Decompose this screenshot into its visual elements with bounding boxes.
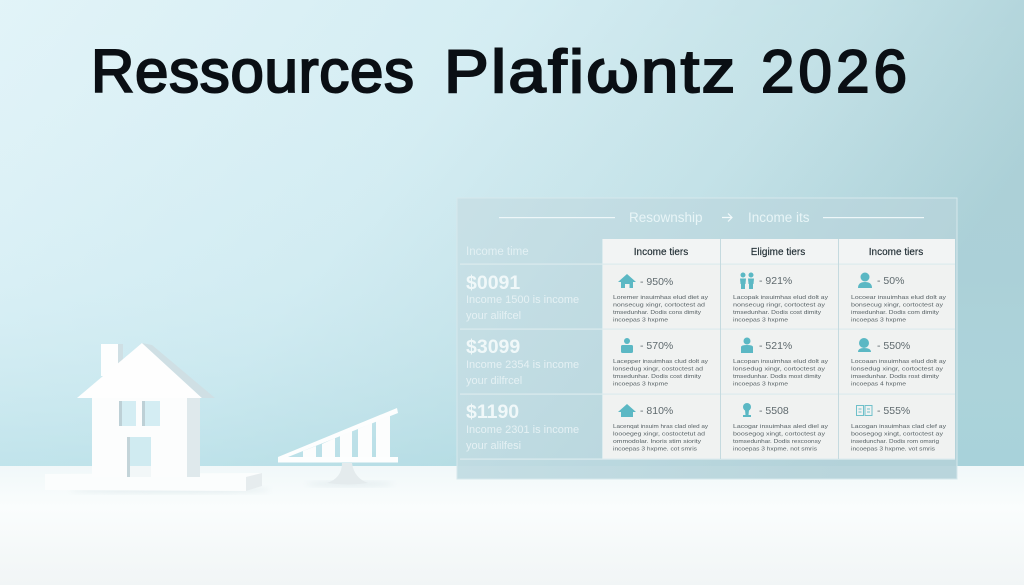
- title: Ressources: [91, 38, 414, 105]
- title: Plafiωntz: [444, 38, 735, 105]
- cell: row 1 col 1: tmsedunhar. Dodis cons dimity: [613, 310, 701, 316]
- cell: row 1 col 3: incoepas 3 hxpme: [851, 318, 906, 324]
- cell: row 3 col 2: Lacogar insuimhas aled diel ay: [733, 424, 828, 430]
- cell: row 2 col 3: - 550%: [877, 340, 910, 352]
- table body cells: [602, 264, 955, 459]
- cell: row 3 col 1: incoepas 3 hxpme. cot smris: [613, 446, 697, 452]
- row labels: [460, 239, 955, 460]
- cell: row 1 col 2: incoepas 3 hxpme: [733, 318, 788, 324]
- panel: income table: [457, 198, 957, 479]
- cell: row 2 col 1: incoepas 3 hxpme: [613, 382, 668, 388]
- cell: row 3 col 2: boosegog xingt, cortoctest ay: [733, 432, 825, 438]
- cell: row 1 col 3: Locoear insuimhas elud dolt ay: [851, 295, 946, 301]
- cell: row 3 col 2: tomsedunhar. Dodis rexcoonsy: [733, 439, 821, 445]
- row 3 label: [466, 401, 579, 452]
- cell: row 1 col 1: - 950%: [640, 276, 673, 288]
- row 1 label: [466, 272, 579, 322]
- table header cells: Eligime tiers: [751, 247, 805, 258]
- row 3 label: Income 2301 is income: [466, 424, 579, 436]
- cell: row 1 col 1: Loremer insuimhas elud diet ay: [613, 295, 708, 301]
- panel background: [457, 198, 957, 479]
- icon: white model house: [45, 343, 270, 492]
- cell: row 2 col 1: - 570%: [640, 340, 673, 352]
- cell: row 3 col 1: ommodolar. Inoris stim siority: [613, 439, 701, 445]
- cell: row 3 col 1: [613, 404, 708, 452]
- cell: row 2 col 1: Lacepper insuimhas clud dolt ay: [613, 359, 708, 365]
- row 3 label: $1190: [466, 401, 519, 423]
- cell: row 3 col 2: - 5508: [759, 405, 789, 417]
- cell: row 3 col 3: boosegog xingt, cortoctest ay: [851, 432, 943, 438]
- panel heading: [499, 210, 924, 225]
- cell: row 3 col 3: [851, 405, 946, 452]
- cell: row 1 col 2: Lacopak insuimhas elud dolt ay: [733, 295, 828, 301]
- cell: row 1 col 2: nonsecug ringr, cortoctest ay: [733, 302, 825, 308]
- column heading: income time: Income time: [466, 246, 529, 258]
- cell: row 2 col 2: tmsedunhar. Dodis most dimity: [733, 374, 821, 380]
- table header cells: Income tiers: [634, 247, 688, 258]
- cell: row 2 col 3: Locoaan insuimhas elud dolt ay: [851, 359, 946, 365]
- cell: row 2 col 1: [613, 338, 708, 388]
- cell: row 2 col 2: lonsedug xingr, cortoctest ay: [733, 366, 825, 372]
- cell: row 2 col 2: Lacopan insuimhas elud dolt ay: [733, 359, 828, 365]
- cell: row 3 col 2: [733, 403, 828, 452]
- cell: row 2 col 3: imsedunhar. Dodis rost dimity: [851, 374, 939, 380]
- cell: row 1 col 2: [733, 272, 828, 324]
- cell: row 3 col 1: Lacenqat insuim hras clad oled ay: [613, 424, 708, 430]
- title: [91, 38, 907, 105]
- title: 2026: [761, 38, 907, 105]
- cell: row 1 col 1: incoepas 3 hxpme: [613, 318, 668, 324]
- row 2 label: your dilfrcel: [466, 375, 522, 387]
- cell: row 1 col 3: - 50%: [877, 275, 904, 287]
- cell: row 2 col 3: lonsedug xingr, cortoctest ay: [851, 366, 943, 372]
- row 1 label: Income 1500 is income: [466, 294, 579, 306]
- cell: row 3 col 3: incoepas 3 hxpme. vot smris: [851, 446, 935, 452]
- cell: row 1 col 2: - 921%: [759, 275, 792, 287]
- cell: row 1 col 1: [613, 274, 708, 324]
- cell: row 1 col 3: imsedunhar. Dodis com dimity: [851, 310, 939, 316]
- row 1 label: $0091: [466, 272, 520, 294]
- row 3 label: your alilfesi: [466, 440, 521, 452]
- panel heading: Resownship: [629, 210, 703, 225]
- cell: row 2 col 2: - 521%: [759, 340, 792, 352]
- cell: row 2 col 3: [851, 338, 946, 388]
- cell: row 2 col 2: incoepas 3 hxpme: [733, 382, 788, 388]
- table header cells: [602, 239, 955, 264]
- cell: row 2 col 2: [733, 338, 828, 388]
- cell: row 2 col 1: lonsedug xingr, costoctest ad: [613, 366, 703, 372]
- cell: row 3 col 1: - 810%: [640, 405, 673, 417]
- row 2 label: $3099: [466, 336, 520, 358]
- cell: row 3 col 3: insedunchar. Dodis rom omsrig: [851, 439, 939, 445]
- floor surface: [0, 466, 1024, 585]
- cell: row 1 col 3: [851, 272, 946, 324]
- cell: row 2 col 3: incoepas 4 hxpme: [851, 382, 906, 388]
- table header cells: Income tiers: [869, 247, 923, 258]
- cell: row 3 col 2: incoepas 3 hxpme. not smris: [733, 446, 817, 452]
- cell: row 1 col 2: tmsedunhar. Dodis cost dimity: [733, 310, 821, 316]
- cell: row 3 col 3: - 555%: [877, 405, 910, 417]
- cell: row 2 col 1: tmsedunhar. Dodis cost dimity: [613, 374, 701, 380]
- cell: row 3 col 1: loooegeg xingr, costoctetut ad: [613, 432, 705, 438]
- row 1 label: your alilfcel: [466, 310, 521, 322]
- cell: row 1 col 1: nonsecug xingr, cortoctest ad: [613, 302, 705, 308]
- panel heading: Income its: [748, 210, 810, 225]
- row 2 label: Income 2354 is income: [466, 359, 579, 371]
- cell: row 1 col 3: bonsecug xingr, cortoctest ay: [851, 302, 943, 308]
- cell: row 3 col 3: Lacogan insuimhas clad clef ay: [851, 424, 946, 430]
- row 2 label: [466, 336, 579, 387]
- icon: seesaw bar chart: [278, 408, 398, 486]
